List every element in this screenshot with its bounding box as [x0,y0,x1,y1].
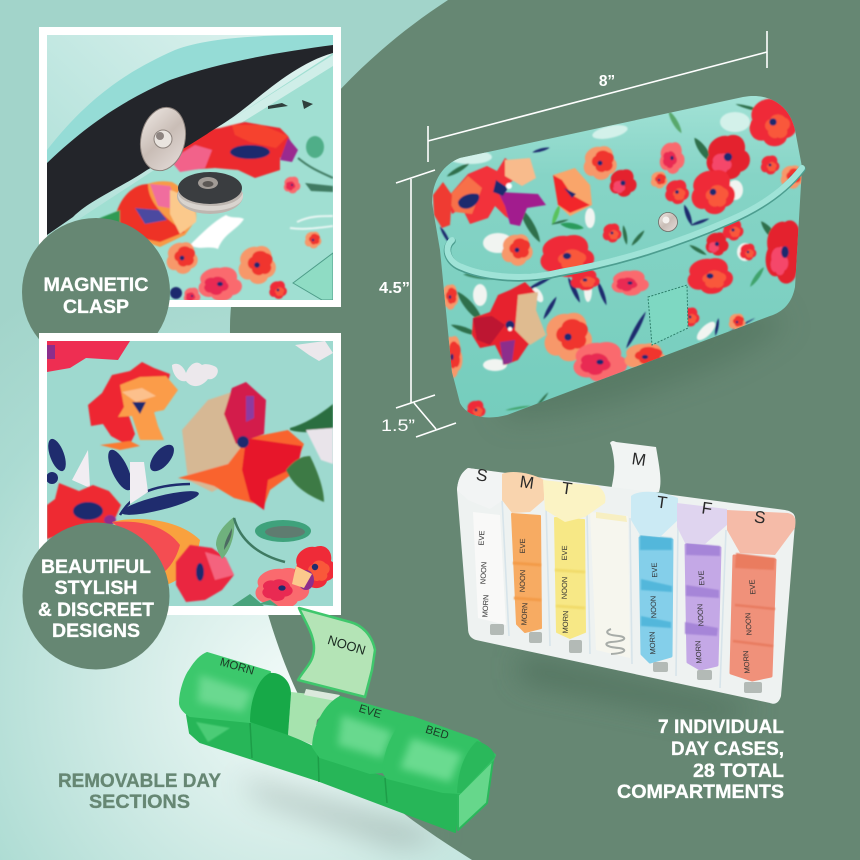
column: sunday: NOON [478,562,489,584]
bloom two [178,382,333,510]
fabric floral case [432,96,805,419]
top-left bloom [47,341,130,372]
springs [490,624,762,693]
morning lid [180,653,270,722]
column: sunday: EVE [477,530,486,546]
bloom one [88,362,178,450]
column: sunday: MORN [480,594,491,618]
sewn tab [648,285,688,345]
shadow: pill organizer [520,655,760,720]
callout: stylish designs: DESIGNS [52,620,140,642]
hinged lids with day letters: T [655,492,668,513]
column: monday [512,514,541,632]
caption: removable sections: SECTIONS [89,791,190,813]
hinged lids with day letters: T [560,478,573,499]
caption: day cases: DAY CASES, [671,738,784,760]
column: thursday [685,543,720,669]
label: depth: 1.5” [381,416,415,435]
hinged lids with day letters: S [753,507,767,528]
caption: removable sections [58,770,221,813]
column: tuesday: MORN [561,610,570,634]
green removable pill section: BED [424,724,450,742]
panel: magnetic clasp photo [39,27,341,307]
callout: magnetic clasp: CLASP [63,296,129,318]
floral print [90,122,333,304]
label: width: 8” [599,73,615,90]
navy leaves [45,437,201,519]
bloom five [176,545,234,602]
empty slot with spring [590,512,630,658]
blooms under trim [540,235,594,277]
bloom six [255,546,336,608]
column: monday: NOON [518,570,527,592]
callout: stylish designs: STYLISH [54,577,138,599]
bloom: side [433,182,452,228]
big bloom lower [472,282,546,365]
column: wednesday: NOON [649,596,658,618]
column: friday: MORN [741,650,752,674]
callout: magnetic clasp [22,218,170,366]
caption: day cases [617,716,784,803]
column: wednesday: MORN [648,631,657,655]
magnetic snap bottom [177,172,243,214]
dimension lines with measurements [396,31,767,437]
column: tuesday [555,518,585,638]
zipper edge [47,35,333,166]
hinged lids with day letters [457,465,795,555]
hinged lids with day letters: S [475,465,489,486]
column: friday: EVE [747,579,757,595]
column: wednesday: EVE [650,562,659,578]
panel: floral print photo [39,333,341,615]
white top dabs [448,112,750,164]
callout: stylish designs: BEAUTIFUL [41,556,151,578]
green backdrop shape [230,0,860,860]
caption: day cases: 7 INDIVIDUAL [658,716,784,738]
label tab [293,253,333,300]
right end cap [457,741,495,793]
callout: stylish designs [22,522,170,670]
evening lid [313,697,410,773]
leaves [446,103,782,411]
white petals [72,450,148,504]
column: monday: EVE [518,538,527,554]
morning end cap [250,673,291,735]
section labels: MORN [218,656,256,678]
bloom three [47,483,121,539]
fabric lining [78,53,333,300]
hinged lids with day letters: F [700,498,713,519]
column: wednesday [640,535,672,662]
navy leaves [439,146,756,350]
column: thursday: MORN [693,640,704,664]
green removable pill section [180,608,495,832]
column: tuesday: EVE [560,545,569,561]
callout: stylish designs: & DISCREET [38,599,154,621]
base [187,715,460,832]
caption: day cases: 28 TOTAL [693,760,784,782]
shadow: fabric case [489,292,791,438]
big bloom left [447,158,546,226]
flap edge trim [447,168,802,278]
magnetic snap top [140,106,186,172]
bedtime lid [383,717,495,793]
open flap: M [631,449,647,470]
black inner flap [47,45,333,235]
green leaves [216,517,311,606]
column: friday: NOON [743,612,754,636]
hinged lids with day letters: M [519,472,535,493]
snap button [658,212,678,232]
column: thursday: EVE [697,570,706,586]
column: tuesday: NOON [560,577,569,599]
white dabs [473,180,753,371]
column: sunday [473,512,506,625]
caption: day cases: COMPARTMENTS [617,781,784,803]
open flap [610,441,660,498]
weekly pill organizer [457,441,795,704]
shadow: green pill section [240,778,450,848]
column: monday: MORN [519,602,530,626]
bloom: poppy [553,168,592,216]
green removable pill section: EVE [357,703,383,721]
caption: removable sections: REMOVABLE DAY [58,770,221,792]
right end face [458,760,493,830]
open noon flap: NOON [326,632,368,658]
open noon flap [298,608,375,697]
column dividers [502,498,726,688]
column: friday [731,553,775,680]
bloom four [112,519,200,585]
clear outer tray [457,468,795,704]
column: thursday: NOON [695,604,706,626]
small blooms upper [584,146,618,180]
callout: magnetic clasp: MAGNETIC [44,274,148,296]
splashes [172,341,333,386]
label: height: 4.5” [379,280,410,297]
open compartment [288,692,340,745]
